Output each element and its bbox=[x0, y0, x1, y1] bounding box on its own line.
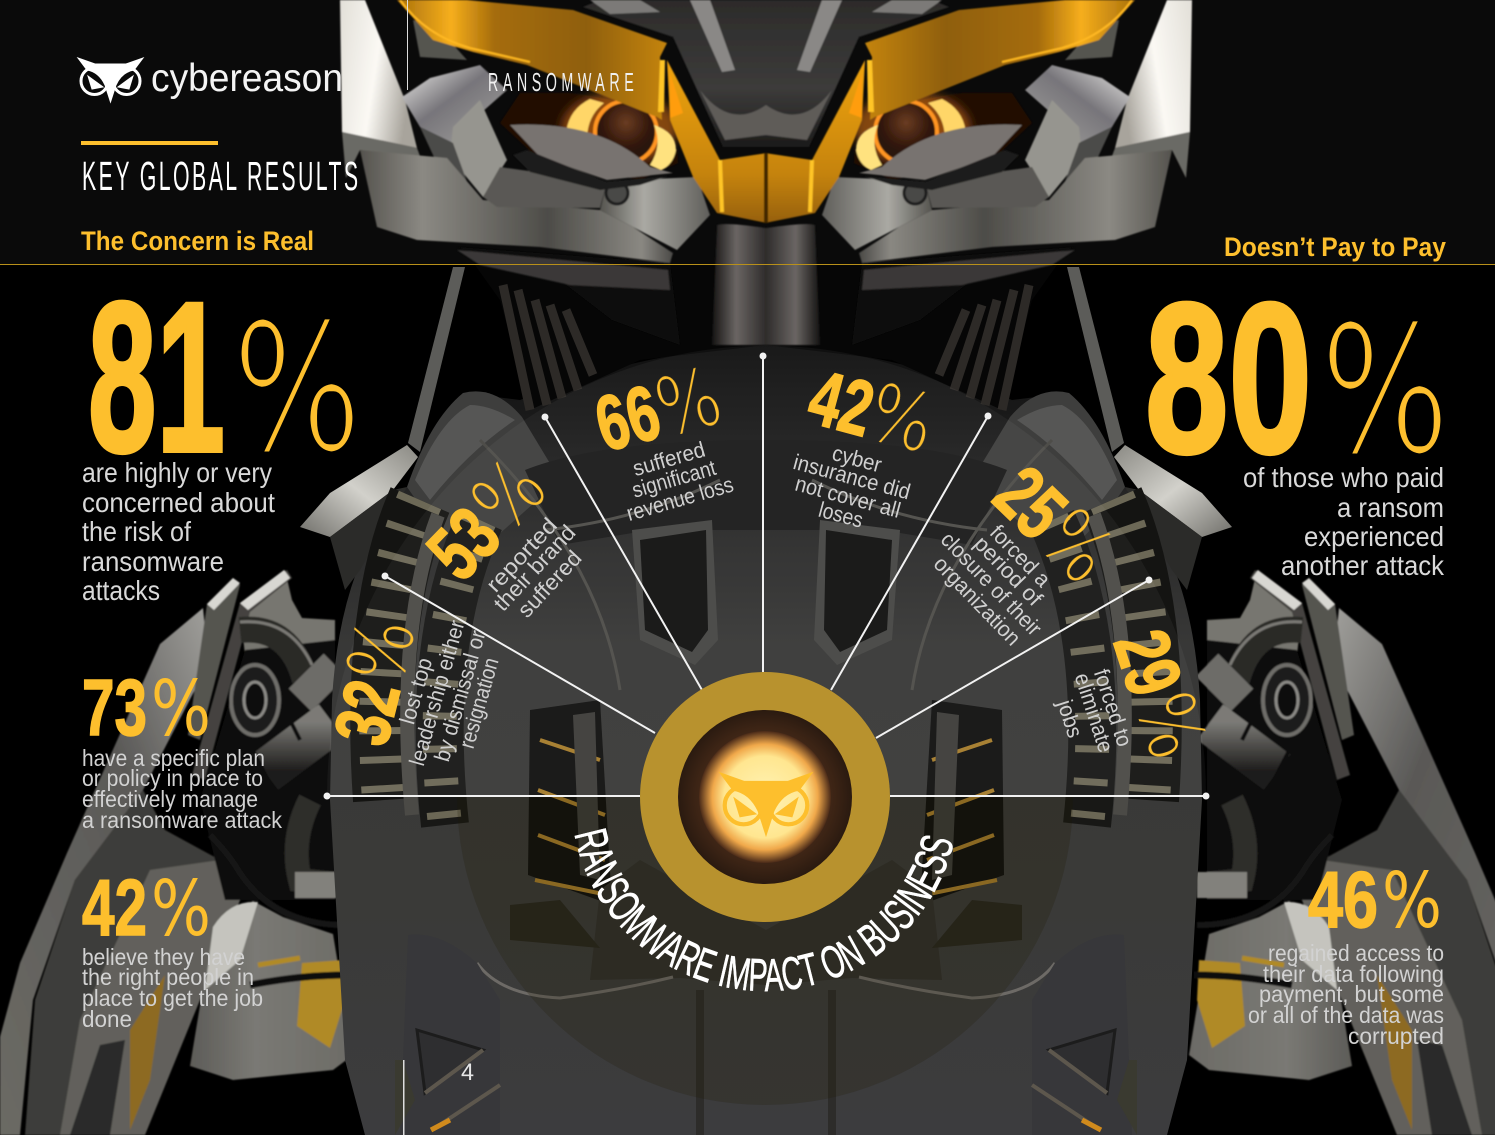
heading: doesn't pay to pay: Doesn’t Pay to Pay bbox=[1224, 232, 1446, 262]
text: 80 percent description bbox=[1243, 462, 1445, 581]
stat: 32 percent leadership: 32 bbox=[317, 672, 417, 753]
stat: 29 percent jobs: % bbox=[1115, 681, 1225, 771]
text: leadership description: lost top bbox=[394, 655, 437, 727]
text: brand description: suffered bbox=[512, 545, 587, 622]
stat: 80 percent: 80 bbox=[1145, 259, 1312, 498]
text: jobs description: jobs bbox=[1052, 696, 1088, 741]
stat: 46 percent bbox=[1248, 855, 1444, 1049]
stat: 80 percent bbox=[1145, 259, 1450, 581]
stat: 25 percent closure: % bbox=[1020, 490, 1132, 603]
robot head illustration bbox=[340, 0, 1192, 345]
text: 73 percent description: a ransomware attack bbox=[82, 807, 282, 833]
heading: the concern is real: The Concern is Real bbox=[81, 226, 314, 256]
text: 46 percent description: or all of the data was bbox=[1248, 1002, 1444, 1028]
text: 73 percent description: or policy in place to bbox=[82, 765, 263, 791]
text: 80 percent description: of those who paid bbox=[1243, 462, 1444, 493]
text: revenue loss description: revenue loss bbox=[624, 472, 736, 526]
text: closure description: organization bbox=[929, 551, 1026, 650]
header background bbox=[0, 0, 1495, 264]
text: 80 percent description: experienced bbox=[1304, 521, 1444, 552]
text: leadership description: resignation bbox=[454, 655, 504, 751]
stat: 53 percent brand: 53 bbox=[410, 491, 517, 596]
stat: 42 percent insurance: 42 bbox=[800, 352, 883, 453]
text: closure description: forced a bbox=[985, 520, 1056, 592]
text: brand description: their brand bbox=[489, 520, 580, 616]
text: insurance description: insurance did bbox=[791, 449, 913, 504]
stat: 73 percent: 73 bbox=[82, 663, 147, 752]
stat: 66 percent revenue loss: % bbox=[645, 349, 732, 458]
text: 73 percent description bbox=[82, 745, 282, 833]
stat: 25 percent closure: 25 bbox=[978, 449, 1083, 556]
text: insurance description bbox=[791, 440, 913, 533]
text: 46 percent description: their data following bbox=[1263, 961, 1444, 987]
text: jobs description: eliminate bbox=[1070, 670, 1119, 756]
text: 42 percent description bbox=[82, 944, 263, 1032]
stat: 81 percent bbox=[82, 258, 362, 606]
text: 73 percent description: have a specific plan bbox=[82, 745, 265, 771]
accent bar bbox=[81, 141, 218, 145]
lower olive fan overlay bbox=[457, 797, 1073, 1105]
stat: 32 percent leadership bbox=[317, 608, 504, 768]
text: 81 percent description: concerned about bbox=[82, 487, 275, 518]
stat: 66 percent revenue loss bbox=[586, 349, 736, 526]
text: brand description: reported bbox=[481, 513, 562, 597]
stat: 32 percent leadership: % bbox=[329, 608, 436, 693]
stat: 81 percent: % bbox=[232, 285, 362, 494]
stat: 42 percent insurance: % bbox=[858, 365, 945, 474]
text: insurance description: cyber bbox=[830, 440, 884, 477]
text: jobs description bbox=[1052, 666, 1137, 756]
text: 46 percent description bbox=[1248, 940, 1444, 1049]
text: revenue loss description: significant bbox=[629, 455, 719, 503]
stat: 80 percent: % bbox=[1320, 287, 1450, 496]
text: 81 percent description: the risk of bbox=[82, 516, 191, 547]
text: closure description: closure of their bbox=[936, 527, 1047, 641]
text: insurance description: loses bbox=[816, 497, 866, 533]
stat: 53 percent brand: % bbox=[453, 440, 566, 552]
text: 42 percent description: done bbox=[82, 1006, 132, 1032]
stat: 73 percent bbox=[82, 663, 282, 833]
text: 80 percent description: a ransom bbox=[1337, 492, 1444, 523]
stat: 42 percent believe: 42 bbox=[82, 863, 147, 952]
header rule bbox=[0, 264, 1495, 265]
text: 46 percent description: payment, but some bbox=[1259, 981, 1444, 1007]
central hub bbox=[640, 672, 890, 922]
vertical rule top bbox=[407, 0, 408, 90]
text: 46 percent description: regained access to bbox=[1268, 940, 1444, 966]
text: leadership description bbox=[394, 617, 504, 768]
stat: 46 percent: % bbox=[1382, 857, 1442, 946]
icon: owl emblem in hub bbox=[720, 773, 812, 835]
stat: 73 percent: % bbox=[151, 665, 211, 754]
radial connector lines with end dots bbox=[324, 354, 1208, 798]
stat: 29 percent jobs: 29 bbox=[1097, 620, 1200, 706]
stat: 66 percent revenue loss: 66 bbox=[586, 367, 669, 468]
text: 81 percent description bbox=[82, 457, 275, 606]
curved heading: ransomware impact on business: RANSOMWARE IMPACT ON BUSINESS bbox=[574, 828, 953, 992]
robot arms illustration bbox=[0, 570, 1495, 1135]
text: 42 percent description: place to get the job bbox=[82, 985, 263, 1011]
text: 73 percent description: effectively manage bbox=[82, 786, 258, 812]
icon: cybereason owl logo bbox=[78, 58, 143, 102]
text: 81 percent description: ransomware bbox=[82, 546, 224, 577]
title: KEY GLOBAL RESULTS bbox=[82, 152, 358, 199]
text: revenue loss description bbox=[624, 437, 736, 526]
text: 81 percent description: attacks bbox=[82, 575, 160, 606]
stat: 42 percent believe bbox=[82, 863, 263, 1032]
text: closure description: period of bbox=[969, 531, 1048, 611]
text: leadership description: leadership either bbox=[404, 617, 469, 768]
stat: 42 percent believe: % bbox=[151, 865, 211, 954]
stat: 46 percent: 46 bbox=[1308, 855, 1378, 944]
text: 46 percent description: corrupted bbox=[1348, 1023, 1444, 1049]
stat: 25 percent closure bbox=[929, 449, 1132, 650]
stat: 81 percent: 81 bbox=[88, 258, 225, 497]
stat: 42 percent insurance bbox=[791, 352, 945, 533]
translucent fan overlay bbox=[327, 346, 1206, 796]
robot torso illustration bbox=[300, 265, 1232, 1135]
text: 80 percent description: another attack bbox=[1281, 550, 1445, 581]
text: jobs description: forced to bbox=[1089, 666, 1137, 750]
text: 42 percent description: believe they have bbox=[82, 944, 245, 970]
vertical rule bottom bbox=[403, 1060, 404, 1135]
section label: RANSOMWARE bbox=[488, 69, 634, 97]
stat: 53 percent brand bbox=[410, 440, 587, 622]
text: revenue loss description: suffered bbox=[630, 437, 708, 481]
text: leadership description: by dismissal or bbox=[429, 628, 490, 764]
stat: 29 percent jobs bbox=[1052, 620, 1225, 771]
text: 42 percent description: the right people in bbox=[82, 964, 254, 990]
logo wordmark: cybereason bbox=[151, 57, 343, 100]
text: 81 percent description: are highly or very bbox=[82, 457, 272, 488]
page number: 4 bbox=[461, 1059, 474, 1086]
text: insurance description: not cover all bbox=[793, 471, 903, 523]
